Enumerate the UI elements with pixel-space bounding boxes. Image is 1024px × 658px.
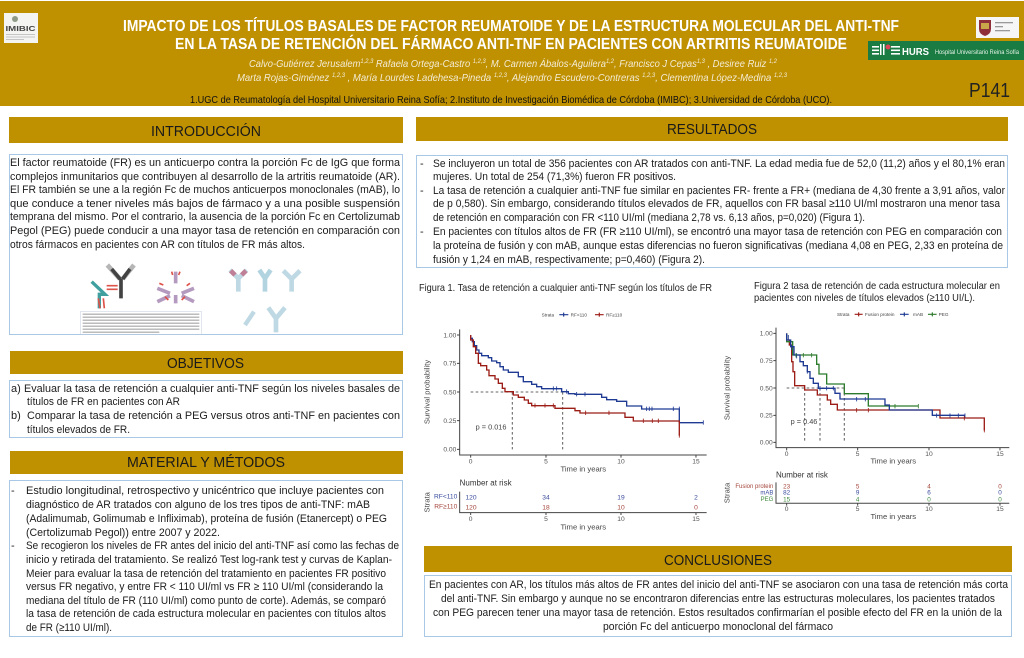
chart: figure 1 survival curve: 5 — [544, 459, 548, 466]
chart: figure 2 survival curve: 6 — [927, 490, 931, 497]
introduction text: otros fármacos en pacientes con AR con títulos de FR más altos. — [10, 239, 305, 251]
chart: figure 1 survival curve: 15 — [692, 459, 700, 466]
title — [123, 16, 899, 53]
red curve — [471, 335, 679, 436]
chart: figure 2 survival curve: 1.00 — [760, 331, 773, 338]
introduction text: temprana del mismo. Por el contrario, la ausencia de la porción Fc en Certolizumab — [10, 211, 400, 223]
chart: figure 2 survival curve: 5 — [856, 506, 860, 513]
introduction text: El factor reumatoide (FR) es un anticuerpo contra la porción Fc de IgG que forma — [10, 157, 401, 169]
affiliations: 1.UGC de Reumatología del Hospital Universitario Reina Sofía; 2.Instituto de Investigación Biomédica de Córdoba (IMIBC); 3.Universidad de Córdoba (UCO). — [190, 94, 832, 106]
title: EN LA TASA DE RETENCIÓN DEL FÁRMACO ANTI-TNF EN PACIENTES CON ARTRITIS REUMATOIDE — [175, 34, 847, 53]
risk table: Number at risk — [776, 470, 828, 479]
panel: material y métodos: mediana del título de FR (110 UI/ml) como punto de corte). Además, se comparó — [26, 595, 386, 607]
authors — [237, 57, 787, 84]
chart: figure 2 survival curve: 5 — [856, 451, 860, 458]
chart: figure 2 survival curve: 0 — [998, 483, 1002, 490]
panel: conclusiones: porción Fc del anticuerpo monoclonal del fármaco — [603, 621, 833, 633]
panel: material y métodos — [10, 480, 402, 636]
chart: figure 1 survival curve: RF≥110 — [434, 503, 458, 510]
green curve — [787, 333, 918, 406]
legend — [542, 312, 623, 317]
panel: objetivos heading — [10, 351, 403, 374]
panel: resultados: - — [420, 158, 424, 170]
chart: figure 2 survival curve: 0 — [927, 496, 931, 503]
chart: figure 2 survival curve: Fusion protein — [735, 484, 773, 490]
chart: figure 2 survival curve: mAB — [760, 490, 773, 496]
panel: resultados: mujeres. Un total de 254 (71,3%) fueron FR positivos. — [433, 171, 676, 183]
red censor ticks — [535, 403, 679, 438]
chart: figure 2 survival curve: 10 — [925, 451, 933, 458]
chart: figure 1 survival curve: 5 — [544, 516, 548, 523]
authors: Marta Rojas-Giménez 1,2,3 , María Lourdes Ladehesa-Pineda 1,2,3, Alejandro Escudero-Contreras 1,2,3, Clementina López-Medina 1,2,3 — [237, 72, 787, 84]
chart: figure 1 survival curve: Time in years — [560, 522, 606, 531]
chart: figure 1 survival curve: Time in years — [560, 465, 606, 474]
chart: figure 2 survival curve: 23 — [783, 483, 791, 490]
chart: figure 2 survival curve: 10 — [925, 506, 933, 513]
panel: conclusiones heading: CONCLUSIONES — [664, 552, 772, 569]
panel: resultados: - — [420, 185, 424, 197]
introduction text: El FR también se une a la región Fc de muchos anticuerpos monoclonales (mAB), lo — [10, 184, 400, 196]
blue curve — [471, 335, 703, 423]
chart: figure 1 survival curve: 10 — [617, 516, 625, 523]
chart: figure 1 survival curve: 15 — [692, 516, 700, 523]
panel: material y métodos: (Adalimumab, Golimumab e Infliximab), proteína de fusión (Etanercept) o PEG — [26, 513, 387, 525]
red curve — [787, 333, 984, 430]
panel: objetivos heading: OBJETIVOS — [167, 355, 244, 372]
chart: figure 2 survival curve: 4 — [856, 496, 860, 503]
chart: figure 1 survival curve: 0 — [469, 516, 473, 523]
chart: figure 2 survival curve: 15 — [996, 451, 1004, 458]
logo: IMIBIC: IMIBIC — [6, 24, 36, 33]
risk table: Number at risk — [460, 479, 512, 488]
panel: resultados: - — [420, 226, 424, 238]
chart: figure 2 survival curve: 0.00 — [760, 440, 773, 447]
panel: objetivos — [10, 380, 402, 438]
panel: introducción — [10, 154, 402, 334]
legend: mAB — [913, 312, 923, 317]
chart: figure 1 survival curve: 0.75 — [443, 361, 457, 368]
panel: material y métodos: Se recogieron los niveles de FR antes del inicio del anti-TNF así como las fechas de — [26, 540, 399, 552]
figure 2 caption: pacientes con niveles de títulos elevados (≥110 UI/L). — [754, 292, 975, 304]
chart: figure 1 survival curve: 0 — [469, 459, 473, 466]
censor ticks — [788, 335, 965, 418]
chart: figure 1 survival curve: 2 — [694, 495, 698, 502]
poster number: P141 — [969, 80, 1010, 102]
chart: figure 2 survival curve: Time in years — [870, 512, 916, 521]
chart: figure 1 survival curve: 18 — [542, 504, 550, 511]
chart: figure 1 survival curve: 34 — [542, 495, 550, 502]
legend: PEG — [939, 312, 949, 317]
legend: Strata — [837, 312, 850, 317]
chart: figure 2 survival curve: 0 — [785, 451, 789, 458]
chart: figure 2 survival curve: 0.75 — [760, 358, 773, 365]
panel: material y métodos: de FR (≥110 UI/ml). — [26, 622, 112, 634]
figure 2 caption — [754, 280, 1000, 304]
legend — [837, 312, 949, 317]
panel: resultados heading — [416, 117, 1008, 141]
legend: Strata — [542, 312, 554, 317]
logo: Universidad de Córdoba — [976, 17, 1019, 38]
chart: figure 1 survival curve: 0 — [694, 504, 698, 511]
introduction text — [10, 157, 401, 251]
chart: figure 2 survival curve: 0 — [785, 506, 789, 513]
introduction text: complejos inmunitarios que contribuyen al desarrollo de la artritis reumatoide (AR). — [10, 171, 400, 183]
legend: RF≥110 — [606, 312, 623, 317]
panel: material y métodos heading: MATERIAL Y MÉTODOS — [127, 454, 285, 471]
chart: figure 2 survival curve: 4 — [927, 483, 931, 490]
panel: material y métodos: Meier para evaluar la tasa de retención del tratamiento en pacientes FR positivo — [26, 568, 386, 580]
introduction text: que conduce a tener niveles más bajos de fármaco y a una posible suspensión — [10, 198, 400, 210]
chart: figure 2 survival curve: 9 — [856, 490, 860, 497]
panel: material y métodos: diagnóstico de AR tratados con alguno de los tres tipos de anti-TNF: mAB — [26, 499, 370, 511]
panel: material y métodos: - — [11, 540, 15, 552]
chart: figure 2 survival curve: 15 — [996, 506, 1004, 513]
chart: figure 2 survival curve: 0 — [998, 496, 1002, 503]
authors: Calvo-Gutiérrez Jerusalem1,2,3 Rafaela Ortega-Castro 1,2,3, M. Carmen Ábalos-Aguilera1,2, Francisco J Cepas1,3 , Desiree Ruiz 1,2 — [249, 57, 777, 70]
panel: material y métodos heading — [10, 451, 403, 474]
legend: Fusion protein — [865, 312, 895, 317]
panel: material y métodos: versus FR negativo, y entre FR < 110 UI/ml vs FR ≥ 110 UI/ml (considerando la — [26, 581, 384, 593]
panel: material y métodos: Estudio longitudinal, retrospectivo y unicéntrico que incluye pacientes con — [26, 485, 384, 497]
panel: resultados heading: RESULTADOS — [667, 121, 757, 138]
chart: figure 1 survival curve: Strata — [423, 491, 432, 513]
chart: figure 2 survival curve — [723, 312, 1009, 521]
chart: figure 2 survival curve: 15 — [783, 496, 791, 503]
chart: figure 1 survival curve: 120 — [465, 495, 477, 502]
panel: objetivos: b) — [11, 410, 21, 422]
chart: figure 1 survival curve: 10 — [617, 504, 625, 511]
panel: objetivos: Evaluar la tasa de retención a cualquier anti-TNF según los niveles basales de — [24, 383, 400, 395]
panel: conclusiones — [424, 576, 1012, 636]
chart: figure 2 survival curve: p = 0.46 — [791, 417, 817, 426]
chart: figure 1 survival curve — [423, 312, 707, 531]
panel: resultados: fusión y 1,24 en mAB, respectivamente; p=0,460) (Figura 2). — [433, 254, 705, 266]
chart: figure 1 survival curve: 10 — [617, 459, 625, 466]
chart: figure 2 survival curve: 0.50 — [760, 385, 773, 392]
chart: figure 1 survival curve: 0.00 — [443, 447, 457, 454]
blue curve — [787, 333, 965, 415]
panel: material y métodos: inicio y retirada del tratamiento. Se realizó Test log-rank test y curvas de Kaplan- — [26, 554, 392, 566]
panel: objetivos: títulos de FR en pacientes con AR — [27, 396, 180, 408]
panel: conclusiones heading — [424, 546, 1012, 572]
legend: RF<110 — [571, 312, 587, 317]
chart: figure 1 survival curve: Survival probability — [423, 360, 432, 424]
panel: material y métodos: la tasa de retención de cada estructura molecular en pacientes con títulos altos — [26, 608, 386, 620]
chart: figure 2 survival curve: Survival probability — [723, 356, 732, 420]
panel: introducción heading — [9, 117, 403, 143]
chart: figure 2 survival curve: 0 — [998, 490, 1002, 497]
chart: figure 2 survival curve: PEG — [761, 497, 774, 503]
chart: figure 1 survival curve: 19 — [617, 495, 625, 502]
chart: figure 2 survival curve: Strata — [723, 482, 732, 503]
header banner — [0, 1, 1024, 106]
logo: HURS hospital — [868, 41, 1024, 60]
panel: objetivos: títulos elevados de FR. — [27, 424, 130, 436]
figure: antibody structures — [80, 265, 300, 334]
chart: figure 2 survival curve: 0.25 — [760, 413, 773, 420]
panel: material y métodos: - — [11, 485, 15, 497]
panel: introducción heading: INTRODUCCIÓN — [151, 123, 261, 140]
figure 2 caption: Figura 2 tasa de retención de cada estructura molecular en — [754, 280, 1000, 292]
chart: figure 1 survival curve: p = 0.016 — [476, 422, 506, 431]
introduction text: Pegol (PEG) puede conducir a una mayor tasa de retención en comparación con — [10, 225, 400, 237]
figure 1 caption: Figura 1. Tasa de retención a cualquier anti-TNF según los títulos de FR — [419, 282, 712, 294]
chart: figure 1 survival curve: 1.00 — [443, 332, 457, 339]
chart: figure 2 survival curve: 5 — [856, 483, 860, 490]
chart: figure 1 survival curve: 0.50 — [443, 389, 457, 396]
panel: material y métodos: (Certolizumab Pegol)) entre 2007 y 2022. — [26, 527, 220, 539]
chart: figure 1 survival curve: 0.25 — [443, 418, 457, 425]
panel: resultados — [416, 156, 1008, 268]
panel: objetivos: a) — [11, 383, 21, 395]
chart: figure 1 survival curve: 120 — [465, 504, 477, 511]
panel: resultados: de retención en comparación con FR <110 UI/ml (mediana 2,78 vs. 6,13 años, p=0,020) (Figura 1). — [433, 212, 865, 224]
panel: objetivos: Comparar la tasa de retención a PEG versus otros anti-TNF en pacientes con — [27, 410, 400, 422]
chart: figure 1 survival curve: RF<110 — [434, 494, 458, 501]
title: IMPACTO DE LOS TÍTULOS BASALES DE FACTOR REUMATOIDE Y DE LA ESTRUCTURA MOLECULAR DEL ANTI-TNF — [123, 16, 899, 35]
blue censor ticks — [553, 386, 703, 425]
logo: HURS hospital: HURS — [902, 47, 929, 58]
chart: figure 2 survival curve: 82 — [783, 490, 791, 497]
chart: figure 2 survival curve: Time in years — [870, 457, 916, 466]
logo: IMIBIC — [4, 13, 38, 43]
